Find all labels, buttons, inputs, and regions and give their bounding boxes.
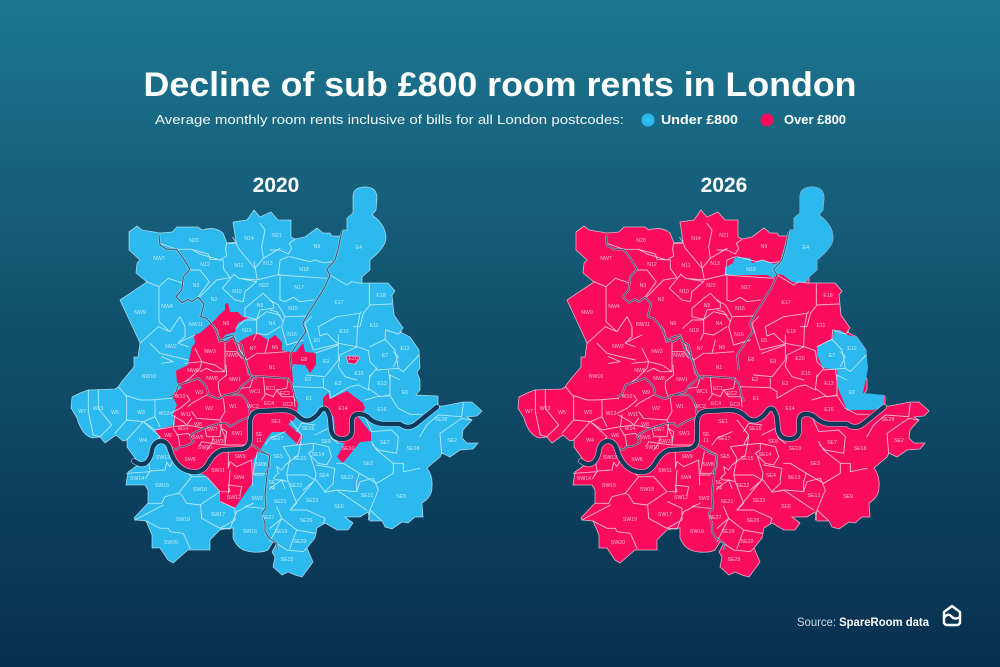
postcode labels: SW3 xyxy=(212,439,224,445)
postcode labels: SW15 xyxy=(155,483,169,489)
postcode labels: W7 xyxy=(525,409,533,415)
postcode labels: NW5 xyxy=(673,353,685,359)
title: Decline of sub £800 room rents in London xyxy=(144,66,856,104)
postcode labels: WC2 xyxy=(247,404,259,410)
postcode labels: E4 xyxy=(803,245,809,251)
postcode labels: E11 xyxy=(817,323,826,329)
postcode labels: E20 xyxy=(795,356,805,362)
heading: 2020: 2020 xyxy=(253,174,299,197)
postcode labels: W8 xyxy=(641,422,649,428)
postcode labels: SW6 xyxy=(631,457,643,463)
postcode labels: W4 xyxy=(586,438,594,444)
postcode labels: W13 xyxy=(540,406,550,412)
postcode labels: E9 xyxy=(323,359,329,365)
postcode labels: 11 xyxy=(703,438,709,444)
postcode labels: N6 xyxy=(223,321,229,327)
postcode labels: N12 xyxy=(200,262,210,268)
postcode labels: SW8 xyxy=(702,462,714,468)
postcode labels: SE10 xyxy=(342,446,354,452)
postcode labels: EC1 xyxy=(266,386,276,392)
postcode labels: N13 xyxy=(710,261,720,267)
postcode labels: W9 xyxy=(195,390,203,396)
postcode labels: SE26 xyxy=(747,518,759,524)
postcode labels: SW17 xyxy=(211,512,225,518)
postcode labels: SW7 xyxy=(653,427,665,433)
postcode labels: E16 xyxy=(377,407,387,413)
postcode labels: W7 xyxy=(78,409,86,415)
postcode labels: E4 xyxy=(356,245,362,251)
postcode labels: E12 xyxy=(847,346,857,352)
postcode labels: EC3 xyxy=(730,402,740,408)
postcode labels: SE10 xyxy=(789,446,801,452)
postcode labels: E20 xyxy=(348,356,358,362)
postcode labels: SW3 xyxy=(659,439,671,445)
postcode labels: N2 xyxy=(211,297,217,303)
legend: Under £800 xyxy=(661,113,738,127)
postcode labels: SE14 xyxy=(312,452,324,458)
postcode labels: SE19 xyxy=(722,529,734,535)
postcode labels: NW11 xyxy=(636,322,650,328)
postcode labels: NW4 xyxy=(608,304,620,310)
postcode labels: SE3 xyxy=(810,461,820,467)
postcode labels: SW13 xyxy=(156,455,170,461)
postcode labels: N9 xyxy=(314,244,320,250)
postcode labels: NW2 xyxy=(612,344,624,350)
postcode labels: SE26 xyxy=(300,518,312,524)
postcode labels: SE9 xyxy=(843,494,853,500)
postcode labels: W13 xyxy=(93,406,103,412)
postcode boundaries xyxy=(88,223,472,552)
postcode labels: SW16 xyxy=(243,529,257,535)
postcode labels: W11 xyxy=(628,412,638,418)
postcode labels: SE27 xyxy=(262,515,274,521)
postcode labels: EC4 xyxy=(711,401,721,407)
postcode labels: N18 xyxy=(299,267,309,273)
postcode labels: E18 xyxy=(376,293,386,299)
postcode labels: E13 xyxy=(377,381,387,387)
postcode labels: 24 xyxy=(716,486,722,492)
over 800 E14 and SE10 xyxy=(323,391,371,463)
over 800 base area xyxy=(518,187,929,577)
postcode labels: W1 xyxy=(676,404,684,410)
postcode labels: W3 xyxy=(584,410,592,416)
postcode labels: SE17 xyxy=(271,436,283,442)
postcode labels: E14 xyxy=(785,406,795,412)
postcode labels: SE xyxy=(716,480,723,486)
under 800 N18 and E4 area xyxy=(725,187,833,283)
postcode labels: SW10 xyxy=(198,445,212,451)
postcode labels: N9 xyxy=(761,244,767,250)
postcode labels: SE8 xyxy=(321,439,331,445)
postcode labels: SE16 xyxy=(749,426,761,432)
postcode labels: E6 xyxy=(402,390,408,396)
postcode labels: EC3 xyxy=(283,402,293,408)
postcode labels: N19 xyxy=(689,328,699,334)
postcode labels: SW19 xyxy=(176,517,190,523)
postcode labels: N20 xyxy=(636,238,646,244)
postcode labels: N21 xyxy=(272,233,282,239)
postcode labels: SE13 xyxy=(788,475,800,481)
postcode labels: N22 xyxy=(706,283,716,289)
postcode labels: WC1 xyxy=(696,389,708,395)
postcode labels: N11 xyxy=(234,263,244,269)
postcode labels: E14 xyxy=(338,406,348,412)
postcode labels: E16 xyxy=(824,407,834,413)
postcode labels: SW5 xyxy=(192,435,204,441)
postcode labels: N10 xyxy=(679,289,689,295)
postcode labels: N2 xyxy=(658,297,664,303)
postcode labels: N20 xyxy=(189,238,199,244)
postcode labels: NW3 xyxy=(204,349,216,355)
postcode labels: E3 xyxy=(782,381,788,387)
postcode labels: N8 xyxy=(704,303,710,309)
postcode labels: 11 xyxy=(256,438,262,444)
postcode labels: SE15 xyxy=(741,456,753,462)
postcode labels: SW7 xyxy=(206,427,218,433)
postcode labels: N18 xyxy=(746,267,756,273)
postcode labels: WC1 xyxy=(249,389,261,395)
postcode labels: SE19 xyxy=(275,529,287,535)
postcode labels: SW19 xyxy=(623,517,637,523)
postcode labels: SW12 xyxy=(227,495,241,501)
postcode labels: NW4 xyxy=(161,304,173,310)
postcode labels: NW9 xyxy=(134,310,146,316)
postcode labels: SE22 xyxy=(737,483,749,489)
postcode labels: SE28 xyxy=(435,417,447,423)
postcode labels: NW7 xyxy=(600,256,612,262)
postcode labels: SE xyxy=(269,480,276,486)
postcode labels: W6 xyxy=(164,433,172,439)
postcode labels: N8 xyxy=(257,303,263,309)
postcode labels: E10 xyxy=(786,329,796,335)
postcode labels: SE13 xyxy=(341,475,353,481)
postcode labels: N17 xyxy=(294,285,304,291)
postcode labels: N4 xyxy=(269,321,275,327)
postcode labels: E18 xyxy=(823,293,833,299)
over 800 central London area xyxy=(155,303,316,508)
postcode labels: SE9 xyxy=(396,494,406,500)
postcode labels: W14 xyxy=(625,426,635,432)
postcode labels: W10 xyxy=(622,394,632,400)
postcode labels: NW10 xyxy=(589,374,603,380)
postcode labels: NW11 xyxy=(189,322,203,328)
postcode labels: SW9 xyxy=(234,454,246,460)
postcode labels: SE28 xyxy=(882,417,894,423)
postcode labels: E7 xyxy=(829,353,835,359)
postcode labels: SE3 xyxy=(363,461,373,467)
postcode labels: SE2 xyxy=(447,438,457,444)
postcode labels: SE21 xyxy=(721,499,733,505)
postcode labels: E15 xyxy=(354,371,364,377)
postcode labels: NW1 xyxy=(229,377,241,383)
postcode labels: SW20 xyxy=(611,540,625,546)
subtitle: Average monthly room rents inclusive of bills for all London postcodes: xyxy=(155,112,624,127)
postcode labels: W1 xyxy=(229,404,237,410)
postcode labels: SE23 xyxy=(753,498,765,504)
postcode labels: SW17 xyxy=(658,512,672,518)
postcode labels: N6 xyxy=(670,321,676,327)
postcode labels: N16 xyxy=(287,332,297,338)
postcode labels: NW2 xyxy=(165,344,177,350)
postcode labels: NW7 xyxy=(153,256,165,262)
postcode labels: SW8 xyxy=(255,462,267,468)
postcode labels: EC2 xyxy=(280,391,290,397)
under 800 base area xyxy=(71,187,482,577)
postcode labels: SW18 xyxy=(640,487,654,493)
postcode labels xyxy=(78,233,457,563)
postcode labels: NW10 xyxy=(142,374,156,380)
postcode labels: SW11 xyxy=(211,468,225,474)
postcode labels: SE8 xyxy=(768,439,778,445)
postcode labels: N11 xyxy=(681,263,691,269)
postcode labels: SE25 xyxy=(728,557,740,563)
postcode labels: SW13 xyxy=(603,455,617,461)
postcode labels: NW3 xyxy=(651,349,663,355)
postcode labels: SE xyxy=(703,432,710,438)
river Thames xyxy=(581,407,884,472)
postcode labels: NW5 xyxy=(226,353,238,359)
postcode labels: SW18 xyxy=(193,487,207,493)
postcode labels: W12 xyxy=(159,411,169,417)
over 800 E20 xyxy=(346,356,360,364)
postcode labels: SW10 xyxy=(645,445,659,451)
postcode labels: E15 xyxy=(801,371,811,377)
postcode labels: E6 xyxy=(849,390,855,396)
postcode labels: N1 xyxy=(716,365,722,371)
postcode labels: N22 xyxy=(259,283,269,289)
postcode labels: SW2 xyxy=(698,496,710,502)
postcode labels: SE12 xyxy=(361,493,373,499)
postcode labels: N15 xyxy=(735,306,745,312)
postcode labels: E3 xyxy=(335,381,341,387)
postcode labels: SE20 xyxy=(294,539,306,545)
postcode labels: SE22 xyxy=(290,483,302,489)
postcode labels: N5 xyxy=(272,345,278,351)
postcode labels: E5 xyxy=(314,338,320,344)
postcode labels: N5 xyxy=(719,345,725,351)
postcode labels: SE15 xyxy=(294,456,306,462)
postcode labels: 24 xyxy=(269,486,275,492)
postcode labels: NW6 xyxy=(187,368,199,374)
postcode labels: SW4 xyxy=(233,475,245,481)
postcode labels: E8 xyxy=(301,357,307,363)
postcode labels: SW1 xyxy=(678,431,690,437)
postcode labels: N3 xyxy=(640,283,646,289)
postcode labels: SE7 xyxy=(827,440,837,446)
postcode labels: W5 xyxy=(111,410,119,416)
postcode labels: W14 xyxy=(178,426,188,432)
postcode labels: SE6 xyxy=(781,504,791,510)
postcode labels: N16 xyxy=(734,332,744,338)
postcode labels: SE2 xyxy=(894,438,904,444)
postcode labels: N14 xyxy=(691,236,701,242)
postcode labels: W4 xyxy=(139,438,147,444)
postcode labels: SW5 xyxy=(639,435,651,441)
postcode labels: SE7 xyxy=(380,440,390,446)
postcode labels: W10 xyxy=(175,394,185,400)
postcode labels: NW1 xyxy=(676,377,688,383)
postcode boundaries xyxy=(535,223,919,552)
postcode labels: SE23 xyxy=(306,498,318,504)
source note: Source: SpareRoom data xyxy=(797,617,930,629)
postcode labels xyxy=(525,233,904,563)
postcode labels: E2 xyxy=(305,377,311,383)
postcode labels: N13 xyxy=(263,261,273,267)
heading: 2026: 2026 xyxy=(701,174,747,197)
postcode labels: EC1 xyxy=(713,386,723,392)
postcode labels: W12 xyxy=(606,411,616,417)
postcode labels: SW11 xyxy=(658,468,672,474)
postcode labels: N21 xyxy=(719,233,729,239)
postcode labels: SW16 xyxy=(690,529,704,535)
map: 2026 xyxy=(518,187,929,577)
postcode labels: SE17 xyxy=(718,436,730,442)
postcode labels: NW8 xyxy=(653,376,665,382)
legend xyxy=(642,113,846,127)
postcode labels: EC4 xyxy=(264,401,274,407)
postcode labels: N19 xyxy=(242,328,252,334)
postcode labels: W5 xyxy=(558,410,566,416)
under 800 E7 E12 E6 area xyxy=(817,330,884,410)
postcode labels: N3 xyxy=(193,283,199,289)
postcode labels: SE12 xyxy=(808,493,820,499)
postcode labels: W2 xyxy=(652,406,660,412)
postcode labels: N10 xyxy=(232,289,242,295)
postcode labels: SE6 xyxy=(334,504,344,510)
postcode labels: W2 xyxy=(205,406,213,412)
postcode labels: SW20 xyxy=(164,540,178,546)
postcode labels: N1 xyxy=(269,365,275,371)
postcode labels: SE25 xyxy=(281,557,293,563)
postcode labels: N4 xyxy=(716,321,722,327)
postcode labels: SE xyxy=(256,432,263,438)
postcode labels: N14 xyxy=(244,236,254,242)
postcode labels: W9 xyxy=(642,390,650,396)
postcode labels: SE27 xyxy=(709,515,721,521)
postcode labels: SE18 xyxy=(407,446,419,452)
postcode labels: SW9 xyxy=(681,454,693,460)
postcode labels: SE14 xyxy=(759,452,771,458)
postcode labels: SW15 xyxy=(602,483,616,489)
postcode labels: E9 xyxy=(770,359,776,365)
postcode labels: SE5 xyxy=(273,454,283,460)
postcode labels: E17 xyxy=(334,300,344,306)
postcode labels: SW14 xyxy=(577,476,591,482)
postcode labels: W6 xyxy=(611,433,619,439)
postcode labels: E11 xyxy=(370,323,379,329)
postcode labels: N12 xyxy=(647,262,657,268)
postcode labels: SW12 xyxy=(674,495,688,501)
postcode labels: SE16 xyxy=(302,426,314,432)
postcode labels: N17 xyxy=(741,285,751,291)
postcode labels: SE18 xyxy=(854,446,866,452)
postcode labels: E1 xyxy=(753,396,759,402)
postcode labels: E17 xyxy=(781,300,791,306)
postcode labels: SE4 xyxy=(319,473,329,479)
postcode labels: SW2 xyxy=(251,496,263,502)
postcode labels: N7 xyxy=(697,346,703,352)
postcode labels: E2 xyxy=(752,377,758,383)
postcode labels: SE4 xyxy=(766,473,776,479)
postcode labels: E5 xyxy=(761,338,767,344)
postcode labels: NW6 xyxy=(634,368,646,374)
postcode labels: E7 xyxy=(382,353,388,359)
postcode labels: EC2 xyxy=(727,391,737,397)
legend: Over £800 xyxy=(784,113,846,127)
postcode labels: SE1 xyxy=(718,419,728,425)
postcode labels: SE5 xyxy=(720,454,730,460)
postcode labels: E10 xyxy=(339,329,349,335)
postcode labels: E12 xyxy=(400,346,410,352)
postcode labels: SE1 xyxy=(271,419,281,425)
postcode labels: E13 xyxy=(824,381,834,387)
postcode labels: SE21 xyxy=(274,499,286,505)
postcode labels: E8 xyxy=(748,357,754,363)
postcode labels: E1 xyxy=(306,396,312,402)
postcode labels: W3 xyxy=(137,410,145,416)
postcode labels: NW9 xyxy=(581,310,593,316)
postcode labels: WC2 xyxy=(694,404,706,410)
postcode labels: N7 xyxy=(250,346,256,352)
postcode labels: SW14 xyxy=(130,476,144,482)
postcode labels: N15 xyxy=(288,306,298,312)
map: 2020 xyxy=(71,187,482,577)
postcode labels: SW1 xyxy=(231,431,243,437)
postcode labels: NW8 xyxy=(206,376,218,382)
postcode labels: SE20 xyxy=(741,539,753,545)
postcode labels: W11 xyxy=(181,412,191,418)
icon: SpareRoom house logo xyxy=(944,606,960,625)
postcode labels: W8 xyxy=(194,422,202,428)
postcode labels: SW4 xyxy=(680,475,692,481)
postcode labels: SW6 xyxy=(184,457,196,463)
river Thames xyxy=(134,407,437,472)
